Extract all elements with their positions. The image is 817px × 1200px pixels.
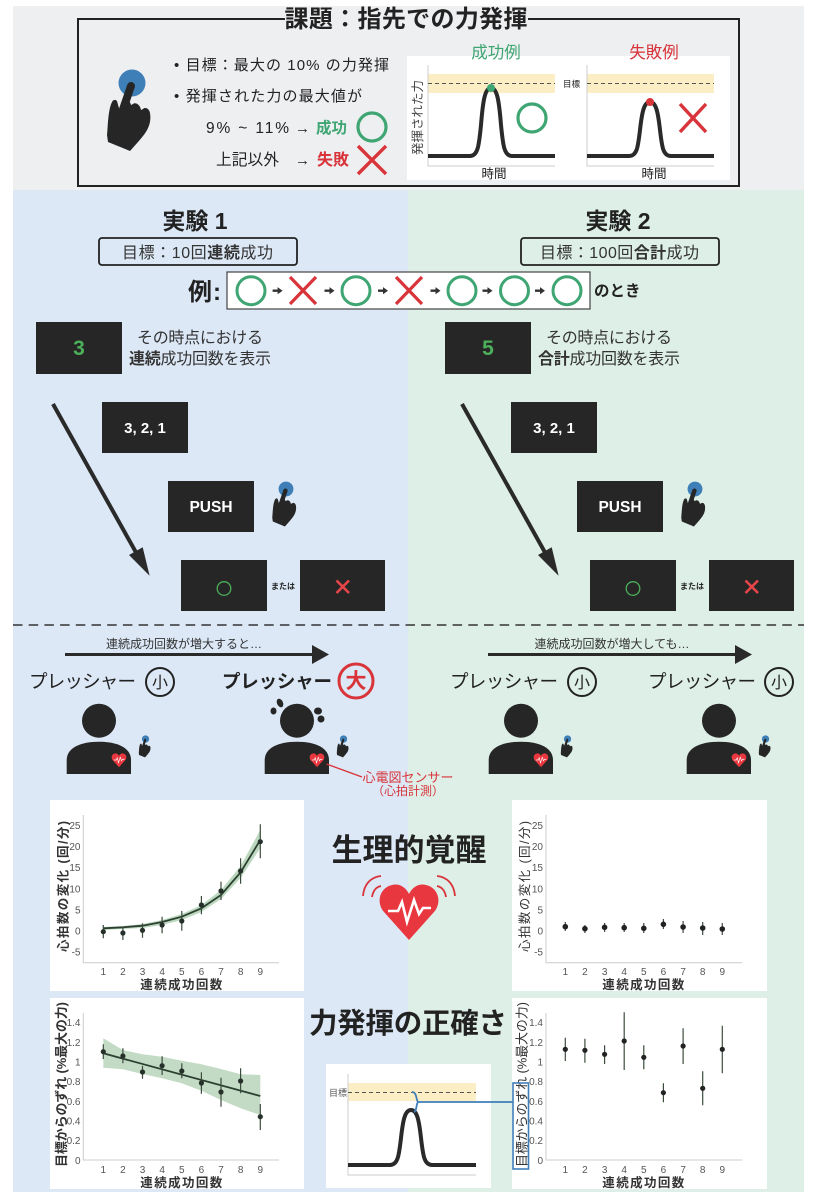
chart: heart rate exp 1: 6 [199,967,205,978]
chart: heart rate exp 1: 20 [69,842,81,853]
chart: heart rate exp 1: 10 [69,884,81,896]
label: high pressure [222,664,373,698]
chart: heart rate exp 1: 8 [238,967,244,978]
text block: task rules: 失敗 [317,150,349,169]
panel: trial flow exp 2: 3, 2, 1 [533,420,575,437]
panel: success and fail example charts [407,56,730,181]
panel: success and fail example charts: 発揮された力 [410,80,425,155]
arrow: streak increases exp 1 [65,636,329,664]
callout: ECG sensor: （心拍計測） [372,783,444,798]
text: count description exp 1 [129,329,271,368]
panel: count display exp 1: 3 [73,337,85,360]
label: low pressure 1 [29,668,174,696]
heading: physiological arousal: 生理的覚醒 [332,833,486,868]
label: high pressure: プレッシャー [222,671,332,692]
panel: trial flow exp 1: または [271,581,295,591]
chart: heart rate exp 2: 心拍数の変化 (回/分) [517,821,532,952]
chart: force deviation exp 2: 2 [582,1165,588,1176]
chart: force deviation exp 1: 0.4 [67,1116,81,1128]
text: count description exp 1: 連続成功回数を表示 [129,350,271,368]
chart: force deviation exp 2: 目標からのずれ (%最大の力) [514,1002,530,1167]
panel: trial flow exp 2: または [680,581,704,591]
icon: person low pressure 1 [67,704,151,774]
arrow: streak increases exp 2 [488,636,752,664]
chart: heart rate exp 1: 心拍数の変化 (回/分) [56,821,70,952]
callout: experiment 1 goal: 目標：10回連続成功 [122,244,273,262]
chart: heart rate exp 1: 25 [69,821,81,832]
panel: count display exp 1 [36,322,122,374]
chart: force deviation exp 2: 1.2 [529,1038,543,1049]
text block: task rules: • 目標：最大の 10% の力発揮 [174,57,389,74]
chart: force deviation exp 1: 目標からのずれ (%最大の力) [54,1002,69,1167]
chart: force deviation exp 1: 3 [140,1165,146,1176]
panel: count display exp 2 [445,322,531,374]
chart: force deviation exp 2: 1 [537,1058,543,1068]
chart: force deviation exp 1 [50,998,304,1190]
arrow: streak increases exp 2: 連続成功回数が増大しても… [534,636,690,651]
chart: force deviation exp 1: 連続成功回数 [140,1175,224,1190]
callout: experiment 2 goal: 目標：100回合計成功 [540,244,699,262]
callout: ECG sensor: 心電図センサー [362,770,454,785]
chart: heart rate exp 2 [512,800,767,992]
icon: person high pressure [265,698,349,774]
callout: ECG sensor [326,764,454,798]
chart: heart rate exp 2: 5 [641,967,647,978]
text block: task rules: • 発揮された力の最大値が [174,88,362,105]
callout: experiment 1 goal [99,238,297,265]
label: low pressure 1: 小 [152,674,168,692]
label: low pressure 2: 小 [574,674,590,692]
chart: force deviation exp 1: 0.6 [67,1097,81,1108]
chart: force deviation exp 2: 0 [537,1156,543,1167]
chart: force deviation exp 2: 1 [563,1165,569,1176]
chart: heart rate exp 1: 連続成功回数 [140,977,224,992]
chart: force deviation exp 1: 0.2 [67,1136,81,1147]
text block: task rules: 上記以外 [216,151,279,169]
arrow: streak increases exp 1: 連続成功回数が増大すると… [106,636,262,651]
chart: heart rate exp 1: 4 [159,967,165,978]
text: count description exp 2 [538,329,680,368]
chart: heart rate exp 2: 9 [720,967,726,978]
panel: example sequence [227,272,590,309]
label: low pressure 3: 小 [771,674,787,692]
icon: person low pressure 2 [489,704,573,774]
icon: pressing hand [107,70,150,151]
text block: task rules: → [295,120,310,137]
label: low pressure 2 [450,668,596,696]
panel: experiment 1 background [13,190,408,1192]
text: count description exp 2: その時点における [546,329,672,347]
text block: task rules: 9% ~ 11% [206,120,289,137]
chart: force deviation exp 1: 0 [75,1156,81,1167]
text block: task rules: 成功 [316,118,347,137]
chart: force deviation exp 1: 2 [120,1165,126,1176]
chart: heart rate exp 2: 6 [661,967,667,978]
chart: heart rate exp 1: 7 [218,967,224,978]
icon: big heart with pulses [363,876,455,940]
chart: force deviation exp 1: 1 [101,1165,107,1176]
panel: trial flow exp 2: PUSH [598,499,642,516]
icon: person low pressure 3 [687,704,771,774]
panel: trial flow exp 1: 3, 2, 1 [124,420,166,437]
chart: force deviation exp 2: 連続成功回数 [602,1175,686,1190]
panel: success and fail example charts: 時間 [641,167,667,181]
chart: heart rate exp 2: 連続成功回数 [602,977,686,992]
chart: force deviation exp 2: 8 [700,1165,706,1176]
chart: heart rate exp 1: -5 [72,948,81,958]
chart: force deviation exp 1: 9 [258,1165,264,1176]
chart: force deviation exp 1: 6 [199,1165,205,1176]
chart: force deviation exp 1: 1 [75,1058,81,1068]
chart: force deviation exp 2 [512,998,767,1190]
chart: heart rate exp 2: 15 [532,863,543,874]
chart: force deviation exp 1: 5 [179,1165,185,1176]
chart: force deviation exp 1: 1.4 [67,1018,81,1029]
chart: force deviation exp 1: 7 [218,1165,224,1176]
panel: trial flow exp 1: PUSH [189,499,233,516]
panel: success and fail example charts: 目標 [563,79,581,89]
text block: task rules [174,57,389,169]
chart: force deviation exp 2: 0.2 [529,1136,543,1147]
panel: task frame [78,19,739,186]
chart: heart rate exp 1: 0 [75,926,81,938]
panel: deviation explainer inset: 目標 [329,1087,347,1098]
chart: heart rate exp 2: 5 [537,906,543,916]
label: low pressure 3: プレッシャー [648,671,756,692]
chart: heart rate exp 1: 1 [101,967,107,978]
chart: heart rate exp 2: 3 [602,967,608,978]
chart: force deviation exp 2: 0.6 [529,1097,543,1108]
chart: force deviation exp 2: 0.8 [529,1077,543,1088]
chart: heart rate exp 1: 9 [258,967,264,978]
chart: heart rate exp 2: -5 [534,948,543,958]
chart: force deviation exp 2: 5 [641,1165,647,1176]
heading: example label: 例: [188,279,221,306]
icon: success circle [358,113,386,141]
chart: heart rate exp 2: 0 [537,926,543,938]
heading: success example: 成功例 [471,43,521,62]
chart: heart rate exp 2: 25 [532,821,543,832]
chart: heart rate exp 2: 2 [582,967,588,978]
text: count description exp 2: 合計成功回数を表示 [538,350,680,368]
chart: heart rate exp 1: 3 [140,967,146,978]
icon: fail cross [358,146,386,174]
chart: heart rate exp 1: 5 [179,967,185,978]
label: low pressure 1: プレッシャー [29,671,136,692]
chart: force deviation exp 2: 4 [621,1165,627,1176]
panel: experiment 2 background [408,190,804,1192]
chart: heart rate exp 2: 7 [680,967,686,978]
chart: force deviation exp 2: 0.4 [529,1116,543,1128]
panel: task background [13,6,804,190]
text: count description exp 1: その時点における [137,329,263,347]
chart: force deviation exp 1: 1.2 [67,1038,81,1049]
label: low pressure 2: プレッシャー [450,671,558,692]
panel: trial flow exp 1 [53,402,385,611]
heading: experiment 2: 実験 2 [585,208,651,234]
chart: heart rate exp 1: 5 [75,906,81,916]
chart: force deviation exp 2: 9 [720,1165,726,1176]
panel: count display exp 2: 5 [482,337,494,360]
chart: force deviation exp 2: 7 [680,1165,686,1176]
heading: experiment 1: 実験 1 [162,208,228,234]
chart: heart rate exp 2: 1 [563,967,569,978]
chart: heart rate exp 1 [50,800,304,992]
panel: success and fail example charts: 時間 [481,167,507,181]
label: high pressure: 大 [346,670,366,693]
chart: force deviation exp 1: 4 [159,1165,165,1176]
chart: force deviation exp 2: 1.4 [529,1018,543,1029]
callout: experiment 2 goal [521,238,719,265]
text: when: のとき [594,282,641,300]
chart: heart rate exp 2: 10 [532,884,543,896]
heading: force accuracy: 力発揮の正確さ [309,1008,507,1040]
chart: heart rate exp 2: 4 [621,967,627,978]
chart: force deviation exp 1: 8 [238,1165,244,1176]
chart: heart rate exp 1: 2 [120,967,126,978]
chart: force deviation exp 2: 6 [661,1165,667,1176]
title: 課題：指先での力発揮 [284,6,528,33]
panel: trial flow exp 2 [462,402,794,611]
text block: task rules: → [295,152,310,169]
chart: force deviation exp 2: 3 [602,1165,608,1176]
label: low pressure 3 [648,668,793,696]
panel: deviation explainer inset [326,1064,513,1188]
heading: fail example: 失敗例 [629,43,679,62]
chart: force deviation exp 1: 0.8 [67,1077,81,1088]
chart: heart rate exp 2: 8 [700,967,706,978]
chart: heart rate exp 2: 20 [532,842,543,853]
chart: heart rate exp 1: 15 [69,863,81,874]
